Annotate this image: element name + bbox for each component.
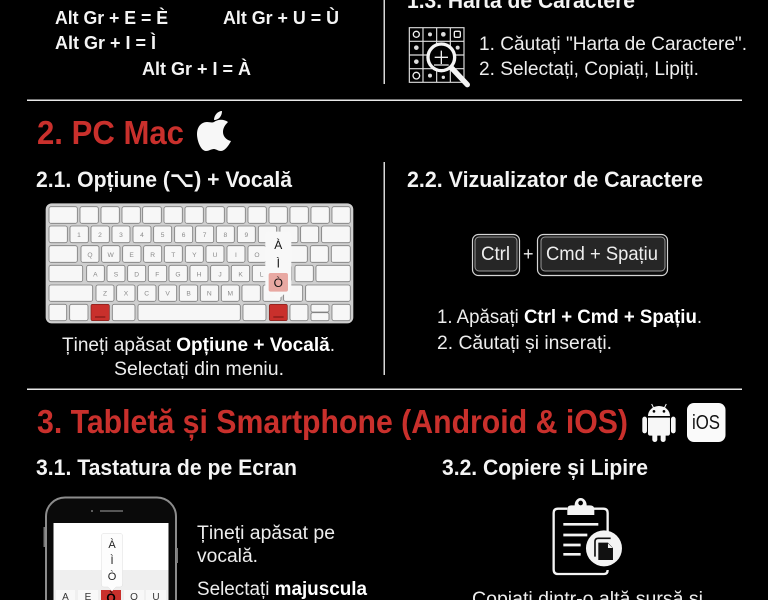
icon: clipboard with copy badge	[554, 498, 622, 574]
keyboard illustration: D	[134, 272, 139, 279]
keyboard illustration: R	[150, 252, 155, 259]
text block: phone instructions	[197, 523, 367, 600]
keyboard illustration: X	[124, 291, 129, 298]
icon: android robot	[642, 404, 676, 442]
heading: 3.1 Tastatura de pe Ecran: 3.1. Tastatura de pe Ecran	[36, 455, 297, 480]
icon: iOS badge	[687, 403, 726, 442]
keyboard illustration: Q	[87, 252, 93, 259]
keyboard illustration	[46, 203, 353, 323]
text block: character viewer steps	[437, 307, 702, 354]
keyboard illustration: O	[254, 252, 260, 259]
text block: character map steps: 1. Căutați "Harta de Caractere".	[479, 34, 747, 55]
keyboard illustration: C	[144, 291, 149, 298]
keyboard illustration: 8	[223, 232, 227, 239]
keyboard illustration: A	[93, 272, 98, 279]
accent popup on phone: Ì	[110, 554, 114, 567]
heading: 2.2 Vizualizator de Caractere: 2.2. Vizualizator de Caractere	[407, 167, 703, 192]
keyboard illustration: 9	[244, 232, 248, 239]
keyboard illustration: 6	[182, 232, 186, 239]
icon: apple logo	[197, 111, 231, 151]
text block: phone instructions: Selectați majuscula	[197, 579, 367, 600]
keyboard illustration: T	[171, 252, 175, 259]
keyboard illustration: I	[235, 252, 237, 259]
keyboard illustration: 3	[119, 232, 123, 239]
text block: character viewer steps: 2. Căutați și inserați.	[437, 333, 612, 354]
text block: keyboard caption: Țineți apăsat Opțiune + Vocală.	[62, 335, 335, 356]
accent popup on phone: Ò	[108, 570, 117, 583]
keyboard illustration: 2	[98, 232, 102, 239]
keyboard illustration: 5	[161, 232, 165, 239]
keyboard illustration: F	[155, 272, 159, 279]
keyboard illustration: Z	[103, 291, 107, 298]
heading: 2.1 Optiune + Vocala: 2.1. Opțiune (⌥) + Vocală	[36, 167, 293, 192]
keyboard illustration: L	[260, 272, 264, 279]
key combination: Ctrl + Cmd + Space	[472, 234, 668, 276]
text block: keyboard caption	[62, 335, 335, 380]
icon: character map with magnifier	[409, 28, 467, 85]
keyboard illustration: 4	[140, 232, 144, 239]
text block: Alt Gr shortcuts: Alt Gr + E = È	[55, 7, 168, 28]
keyboard illustration: J	[218, 272, 222, 279]
key combination: Ctrl + Cmd + Space: Cmd + Spațiu	[546, 244, 658, 265]
accent popup on phone	[102, 534, 122, 591]
accent popup on keyboard: À	[274, 237, 282, 252]
keyboard illustration: V	[165, 291, 170, 298]
accent popup on keyboard: Ò	[274, 275, 283, 290]
text block: character map steps	[479, 34, 747, 80]
keyboard illustration: B	[186, 291, 191, 298]
keyboard illustration: U	[213, 252, 218, 259]
accent popup on keyboard	[265, 232, 291, 299]
text block: phone instructions: vocală.	[197, 546, 258, 567]
keyboard illustration: S	[114, 272, 119, 279]
keyboard illustration: Y	[192, 252, 197, 259]
icon: iOS badge: iOS	[692, 412, 720, 434]
keyboard illustration: E	[129, 252, 134, 259]
accent popup on phone: À	[108, 538, 116, 551]
keyboard illustration: K	[238, 272, 243, 279]
heading: 3.2 Copiere si Lipire: 3.2. Copiere și Lipire	[442, 455, 648, 480]
keyboard illustration: G	[175, 272, 181, 279]
heading: 2. PC Mac: 2. PC Mac	[37, 114, 184, 151]
keyboard illustration: 7	[203, 232, 207, 239]
keyboard illustration: W	[108, 252, 115, 259]
keyboard illustration: 1	[77, 232, 81, 239]
text block: character map steps: 2. Selectați, Copiați, Lipiți.	[479, 59, 699, 80]
key combination: Ctrl + Cmd + Space: +	[523, 244, 534, 264]
keyboard illustration: N	[207, 291, 212, 298]
key combination: Ctrl + Cmd + Space: Ctrl	[481, 244, 510, 265]
text block: Alt Gr shortcuts: Alt Gr + I = Ì	[55, 32, 156, 53]
text block: character viewer steps: 1. Apăsați Ctrl + Cmd + Spațiu.	[437, 307, 702, 328]
text block: Alt Gr shortcuts: Alt Gr + I = À	[142, 58, 251, 79]
text block: phone instructions: Țineți apăsat pe	[197, 523, 335, 544]
accent popup on keyboard: Ì	[277, 255, 280, 270]
keyboard illustration: M	[228, 291, 233, 298]
text block: keyboard caption: Selectați din meniu.	[114, 359, 284, 380]
text block: Alt Gr shortcuts: Alt Gr + U = Ù	[223, 7, 339, 28]
text block: Alt Gr shortcuts	[55, 7, 339, 79]
phone illustration	[44, 498, 178, 600]
heading: 3. Tableta si Smartphone: 3. Tabletă și Smartphone (Android & iOS)	[37, 403, 628, 441]
keyboard illustration: H	[197, 272, 202, 279]
